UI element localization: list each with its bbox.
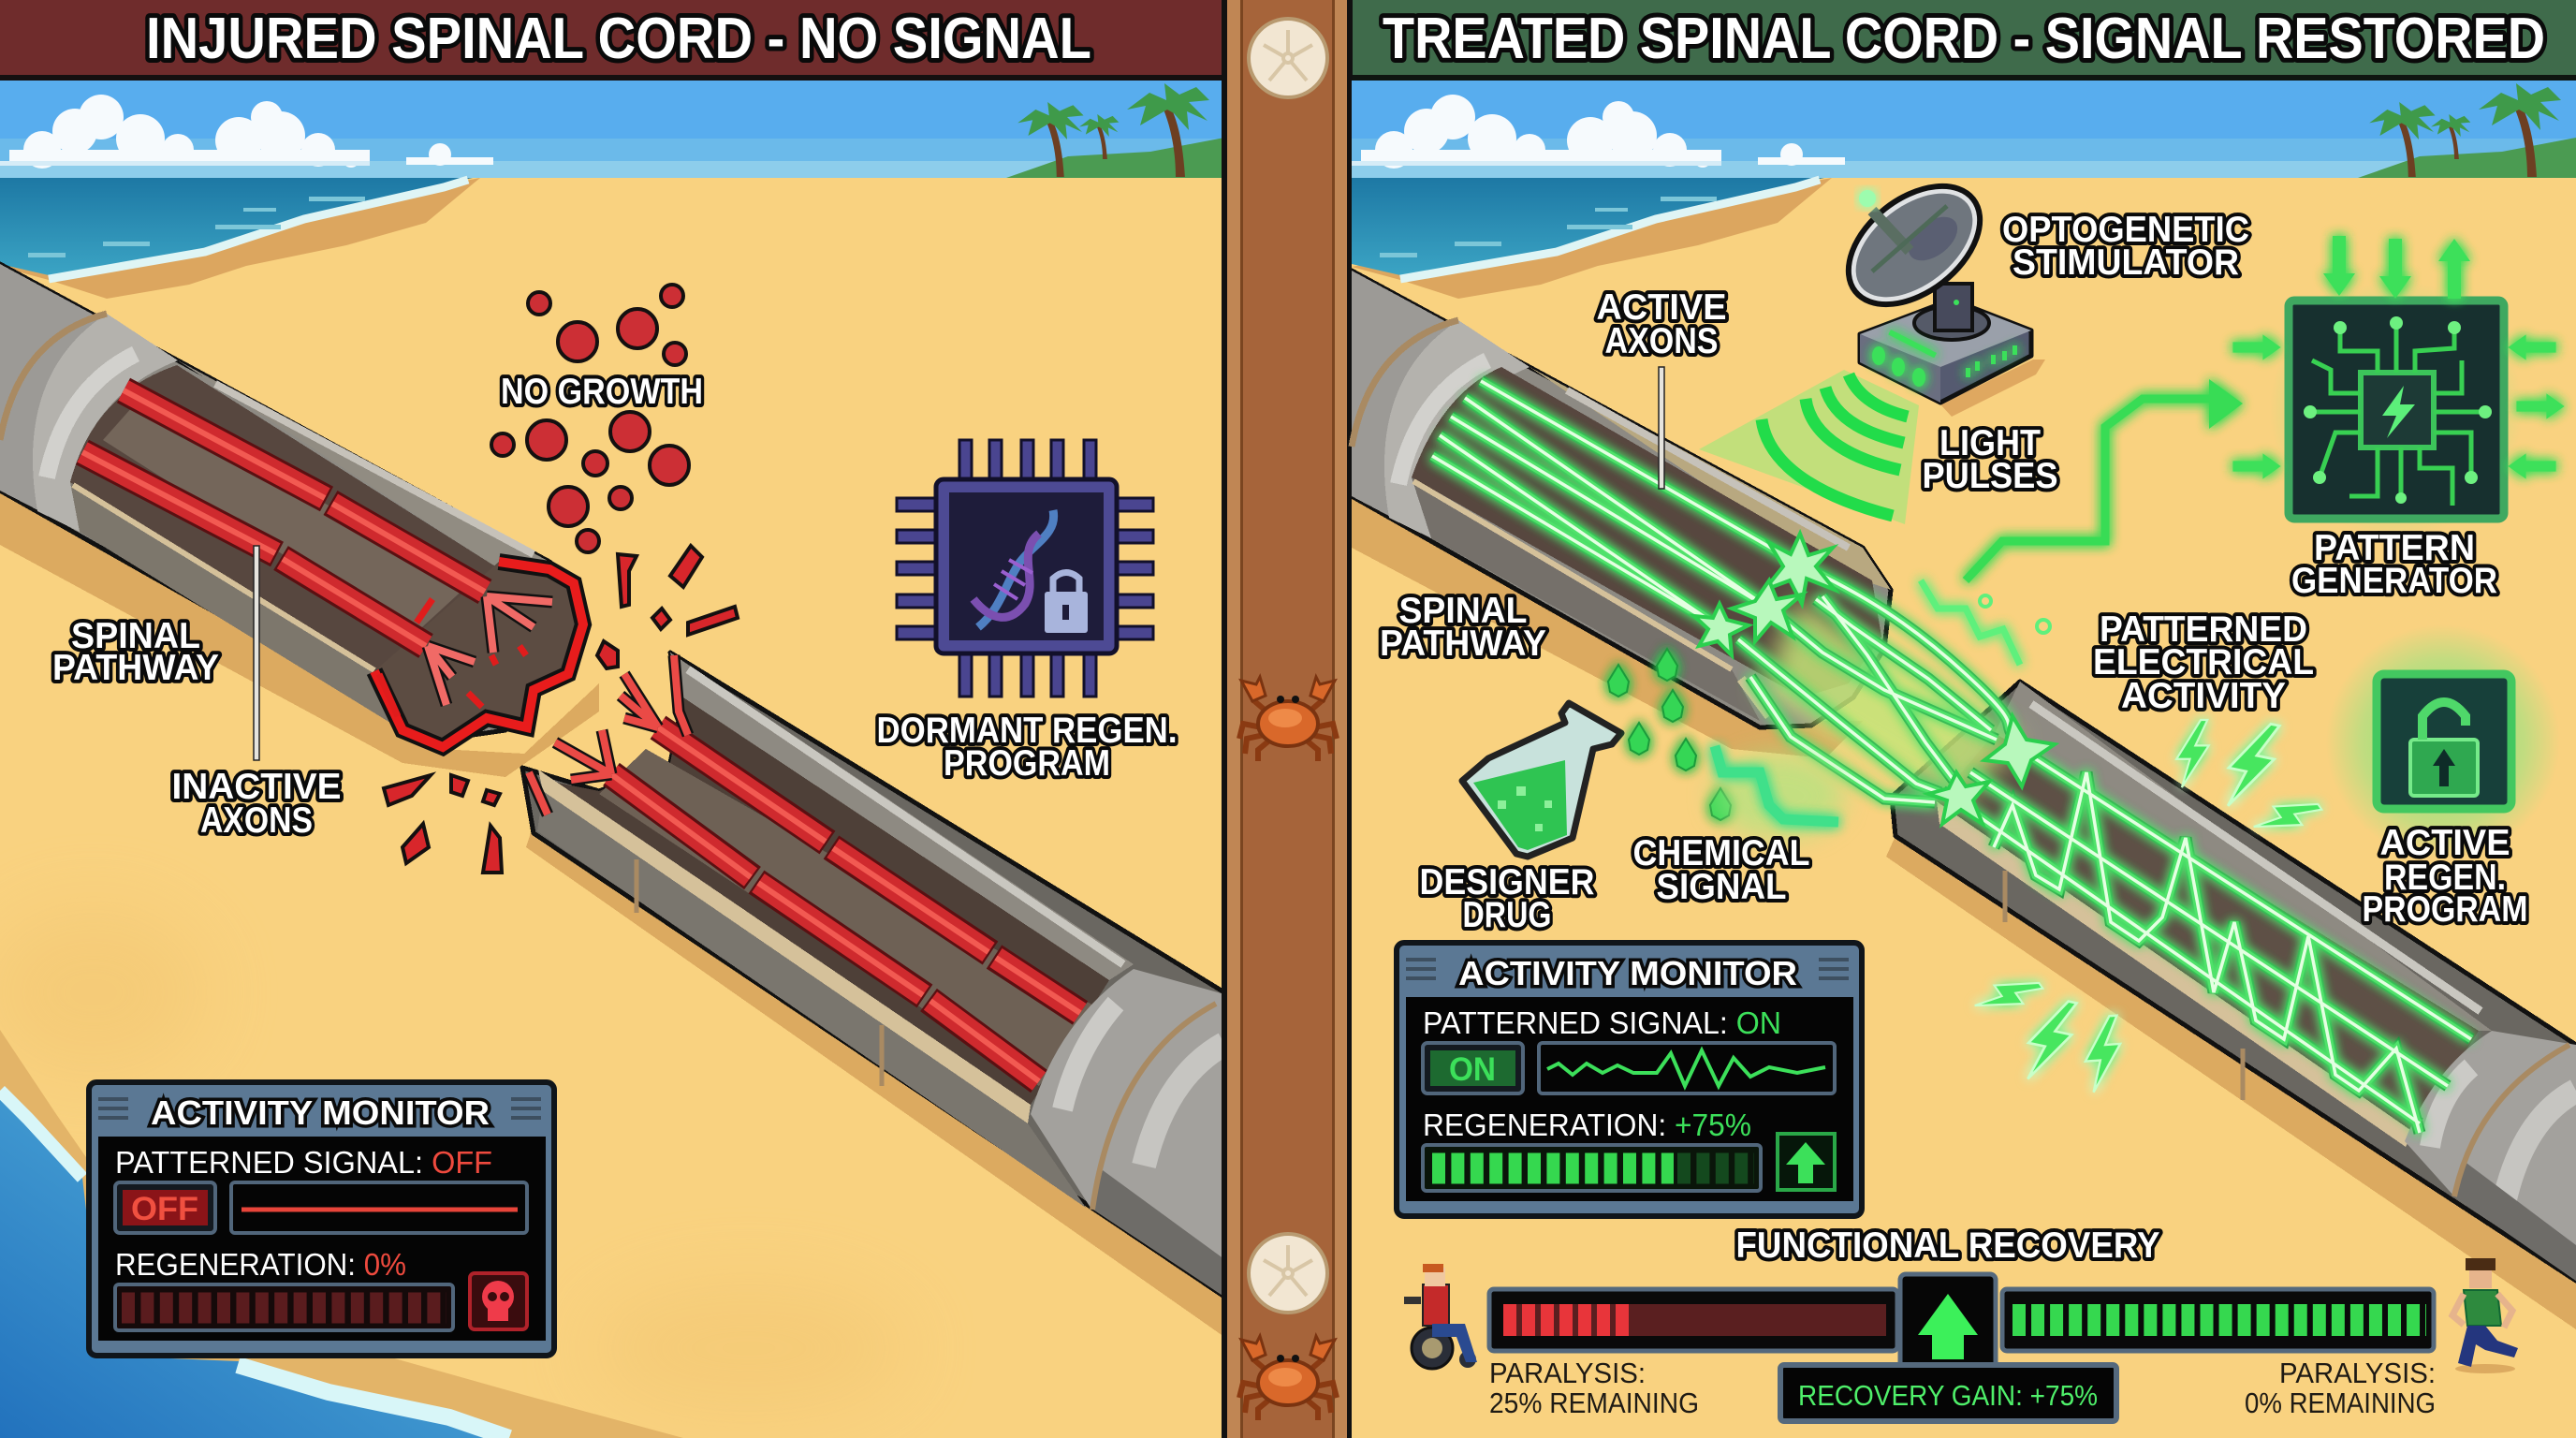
panel: treated spinal cord bbox=[1352, 0, 2576, 1438]
label: active regen program bbox=[2363, 823, 2527, 930]
label: patterned electrical activity bbox=[2093, 609, 2314, 716]
label: chemical signal: CHEMICAL bbox=[1632, 833, 1810, 873]
label: light pulses bbox=[1923, 423, 2057, 496]
signal arrows around generator bbox=[2232, 236, 2565, 479]
regeneration bar: empty bbox=[115, 1284, 453, 1330]
label: patterned electrical activity: ACTIVITY bbox=[2121, 676, 2286, 716]
beach background left bbox=[0, 81, 1224, 1438]
severed pipe: upper segment bbox=[0, 264, 599, 777]
label: spinal pathway (left) bbox=[52, 616, 219, 688]
panel: injured spinal cord bbox=[0, 0, 1224, 1438]
label: inactive axons bbox=[172, 767, 341, 841]
activity monitor: on bbox=[1397, 943, 1862, 1216]
icon: up arrow bbox=[1778, 1134, 1835, 1190]
icon: dormant chip with DNA and lock bbox=[897, 440, 1153, 697]
label: pattern generator: GENERATOR bbox=[2291, 561, 2497, 601]
label: active axons bbox=[1597, 287, 1726, 361]
label: dormant regen program: PROGRAM bbox=[944, 743, 1110, 784]
active green axons and electrical trace bbox=[1432, 381, 2471, 1133]
label: optogenetic stimulator bbox=[2002, 210, 2249, 283]
label: active axons: AXONS bbox=[1604, 321, 1719, 361]
ocean bottom-left bbox=[0, 1030, 683, 1438]
light beam cone bbox=[1699, 370, 1919, 524]
paralysis remaining right: 0% REMAINING bbox=[2245, 1387, 2436, 1419]
activity monitor: on: ACTIVITY MONITOR bbox=[1458, 954, 1797, 992]
label: spinal pathway (left): PATHWAY bbox=[52, 648, 219, 688]
label: pattern generator bbox=[2291, 528, 2497, 601]
arrow: to pattern generator bbox=[1966, 379, 2243, 580]
activity monitor: on: REGENERATION: +75% bbox=[1423, 1108, 1751, 1142]
off button: OFF bbox=[131, 1191, 198, 1227]
icon: person in wheelchair bbox=[1404, 1264, 1477, 1369]
label: pattern generator: PATTERN bbox=[2314, 528, 2475, 568]
dead growth particles bbox=[491, 285, 689, 552]
activity monitor: on: PATTERNED SIGNAL: ON bbox=[1423, 1005, 1781, 1040]
label: optogenetic stimulator: STIMULATOR bbox=[2012, 242, 2239, 283]
pipe: lower segment bbox=[1886, 682, 2576, 1329]
icon: skull bbox=[470, 1273, 527, 1329]
label: inactive axons: INACTIVE bbox=[172, 767, 341, 807]
heading: FUNCTIONAL RECOVERY bbox=[1735, 1225, 2160, 1266]
label: active regen program: PROGRAM bbox=[2363, 889, 2527, 930]
squiggle: chemical signal bbox=[1713, 746, 1844, 838]
on button bbox=[1423, 1043, 1523, 1093]
icon: sand dollar top bbox=[1249, 19, 1327, 97]
label: chemical signal: SIGNAL bbox=[1657, 867, 1786, 907]
activity monitor: off: ACTIVITY MONITOR bbox=[151, 1093, 490, 1132]
blast wound bbox=[374, 562, 583, 747]
activity monitor: off: PATTERNED SIGNAL: OFF bbox=[115, 1145, 492, 1180]
pipe: upper segment bbox=[1352, 271, 1891, 758]
label: inactive axons: AXONS bbox=[200, 800, 313, 841]
activity monitor: off bbox=[89, 1082, 554, 1356]
inactive axons, lower segment bbox=[529, 655, 1080, 1081]
label: designer drug: DESIGNER bbox=[1419, 862, 1595, 902]
label: dormant regen program: DORMANT REGEN. bbox=[876, 711, 1178, 751]
icon: optogenetic stimulator dish bbox=[1826, 162, 2045, 417]
icon: crab bottom bbox=[1239, 1336, 1337, 1420]
label: spinal pathway (right): PATHWAY bbox=[1380, 624, 1546, 664]
label: active axons: ACTIVE bbox=[1597, 287, 1726, 328]
icon: crab middle bbox=[1239, 677, 1337, 761]
end sleeve bbox=[1031, 969, 1224, 1297]
on button: ON bbox=[1449, 1051, 1496, 1088]
paralysis bar bbox=[1489, 1289, 1897, 1351]
label: active regen program: REGEN. bbox=[2384, 858, 2506, 898]
header: injured bbox=[0, 0, 1224, 81]
label: light pulses: LIGHT bbox=[1939, 423, 2041, 463]
recovered bar bbox=[2002, 1289, 2434, 1351]
icon: sand dollar bottom bbox=[1249, 1234, 1327, 1313]
icon: active regen unlocked bbox=[2326, 624, 2560, 858]
recovery gain box: RECOVERY GAIN: +75% bbox=[1798, 1379, 2098, 1412]
icon: designer drug flask bbox=[1462, 703, 1621, 857]
label: optogenetic stimulator: OPTOGENETIC bbox=[2002, 210, 2249, 250]
paralysis remaining right: PARALYSIS: bbox=[2279, 1357, 2436, 1389]
inactive axons, upper segment bbox=[82, 390, 552, 716]
label: patterned electrical activity: PATTERNED bbox=[2100, 609, 2307, 650]
severed pipe: lower segment bbox=[522, 653, 1224, 1337]
icon: pattern generator chip bbox=[2270, 281, 2523, 537]
label: designer drug: DRUG bbox=[1462, 895, 1552, 935]
squiggle: electrical near arrow bbox=[1921, 580, 2050, 665]
label: patterned electrical activity: ELECTRICAL bbox=[2093, 642, 2314, 682]
paralysis remaining right bbox=[2245, 1357, 2436, 1419]
label: light pulses: PULSES bbox=[1923, 456, 2057, 496]
beach background right bbox=[1352, 81, 2576, 1438]
waveform trace bbox=[1539, 1043, 1835, 1093]
header: injured: INJURED SPINAL CORD - NO SIGNAL bbox=[146, 7, 1091, 71]
center arrow bbox=[1900, 1274, 1996, 1372]
paralysis remaining left bbox=[1489, 1357, 1699, 1419]
flat signal trace bbox=[231, 1182, 527, 1233]
paralysis remaining left: PARALYSIS: bbox=[1489, 1357, 1646, 1389]
label: dormant regen program bbox=[876, 711, 1178, 784]
leader line: active axons bbox=[1659, 367, 1664, 489]
icon: running person bbox=[2452, 1258, 2518, 1373]
paralysis remaining left: 25% REMAINING bbox=[1489, 1387, 1699, 1419]
glow behind axon fan bbox=[1760, 599, 2022, 805]
off button bbox=[115, 1182, 215, 1233]
leader line: inactive axons bbox=[254, 546, 259, 760]
recovery gain box bbox=[1780, 1365, 2116, 1421]
pipe floor between axons bbox=[103, 398, 468, 637]
activity monitor: off: REGENERATION: 0% bbox=[115, 1247, 406, 1282]
label: designer drug bbox=[1419, 862, 1595, 935]
functional recovery meter bbox=[1404, 1225, 2518, 1421]
sand texture patches bbox=[0, 908, 908, 1414]
label: spinal pathway (right) bbox=[1380, 591, 1546, 664]
light pulses arcs bbox=[1762, 374, 1908, 516]
label: spinal pathway (left): SPINAL bbox=[71, 616, 200, 656]
lightning bolts bbox=[1971, 717, 2322, 1093]
debris shards bbox=[384, 546, 738, 873]
chemical droplets bbox=[1608, 649, 1731, 820]
regeneration bar: 75 percent bbox=[1423, 1145, 1761, 1191]
divider: wooden post bbox=[1222, 0, 1353, 1438]
label: chemical signal bbox=[1632, 833, 1810, 907]
label: active regen program: ACTIVE bbox=[2379, 823, 2510, 863]
label: spinal pathway (right): SPINAL bbox=[1398, 591, 1528, 631]
label: no growth: NO GROWTH bbox=[501, 372, 703, 412]
